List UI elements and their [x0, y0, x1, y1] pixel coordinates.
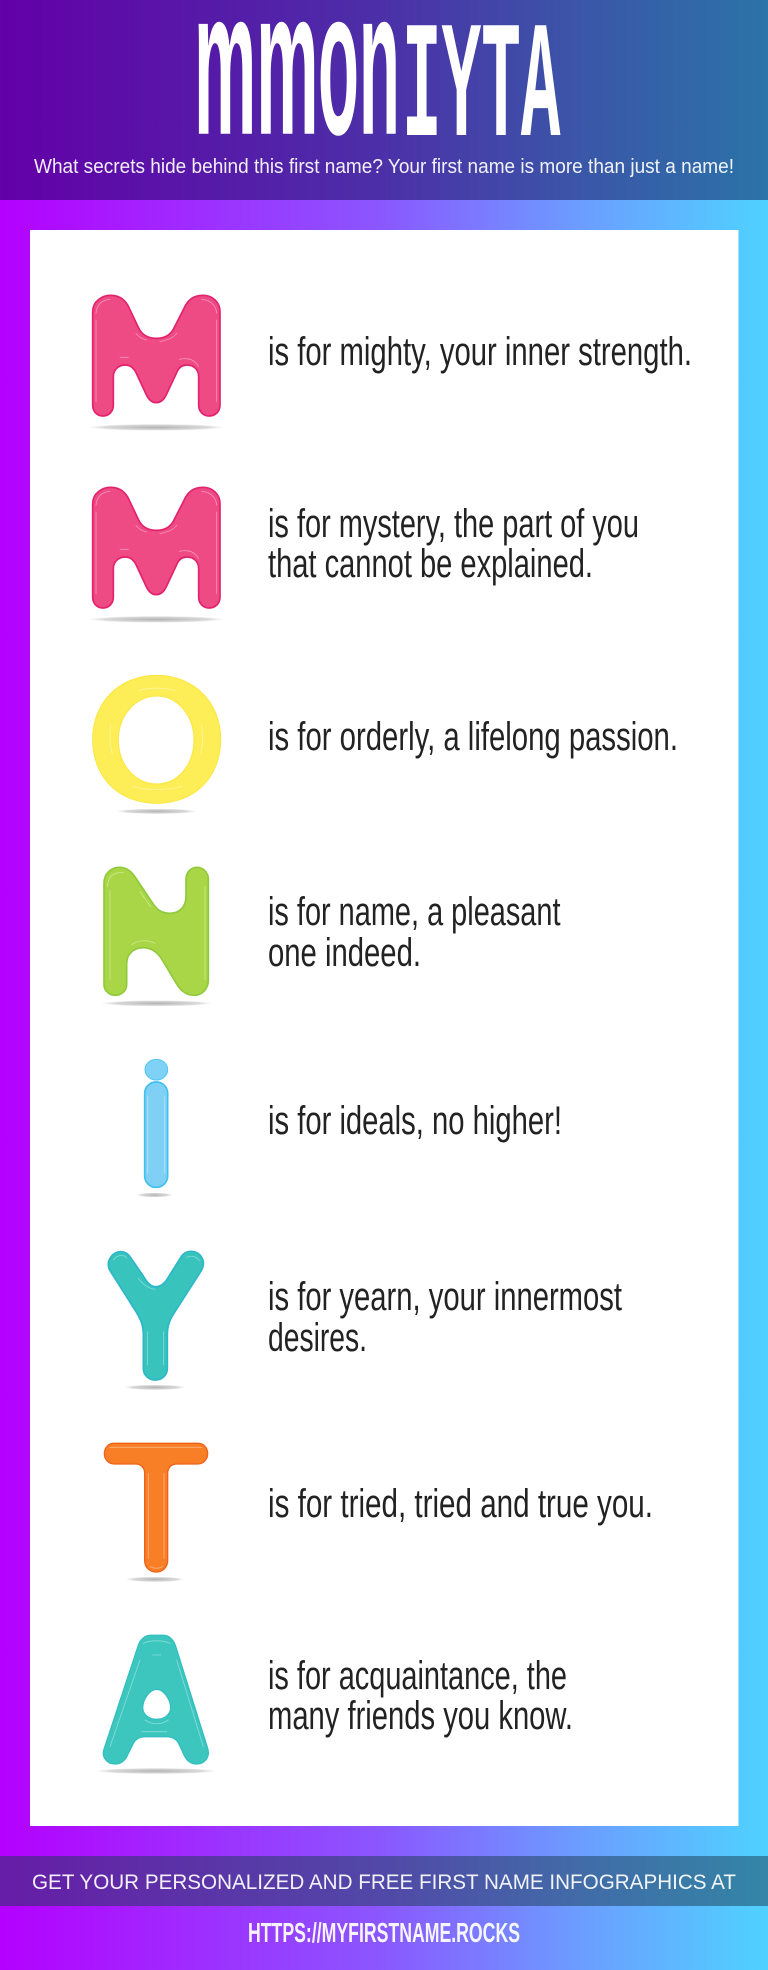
header band [0, 0, 768, 200]
row 8: text: many friends you know. [268, 1694, 573, 1738]
row 4: text [268, 890, 560, 975]
row 8: letter A icon [95, 1635, 217, 1774]
row 8: text [268, 1654, 573, 1738]
row 6: letter Y icon [108, 1251, 203, 1390]
row 4: text: is for name, a pleasant [268, 890, 560, 934]
row 6: text: desires. [268, 1316, 367, 1360]
row 2: letter M icon [88, 487, 225, 623]
title: IYTA [402, 0, 560, 186]
row 1: letter M icon [88, 295, 225, 431]
footer url: HTTPS://MYFIRSTNAME.ROCKS [248, 1917, 520, 1948]
row 5: letter i icon [137, 1059, 173, 1197]
row 8: text: is for acquaintance, the [268, 1654, 567, 1698]
row 4: text: one indeed. [268, 931, 421, 975]
row 5: text: is for ideals, no higher! [268, 1099, 562, 1143]
subtitle: What secrets hide behind this first name? Your first name is more than just a name! [34, 155, 734, 178]
row 4: letter N icon [101, 867, 213, 1006]
footer band [0, 1856, 768, 1906]
row 6: text [268, 1275, 622, 1360]
panel: white card [30, 230, 738, 1826]
title [194, 0, 560, 186]
row 7: letter T icon [104, 1443, 208, 1582]
footer call to action: GET YOUR PERSONALIZED AND FREE FIRST NAME INFOGRAPHICS AT [32, 1871, 736, 1894]
row 3: letter O icon [93, 675, 221, 814]
row 6: text: is for yearn, your innermost [268, 1275, 622, 1319]
row 2: text [268, 502, 639, 586]
row 2: text: that cannot be explained. [268, 542, 593, 586]
row 2: text: is for mystery, the part of you [268, 502, 639, 546]
